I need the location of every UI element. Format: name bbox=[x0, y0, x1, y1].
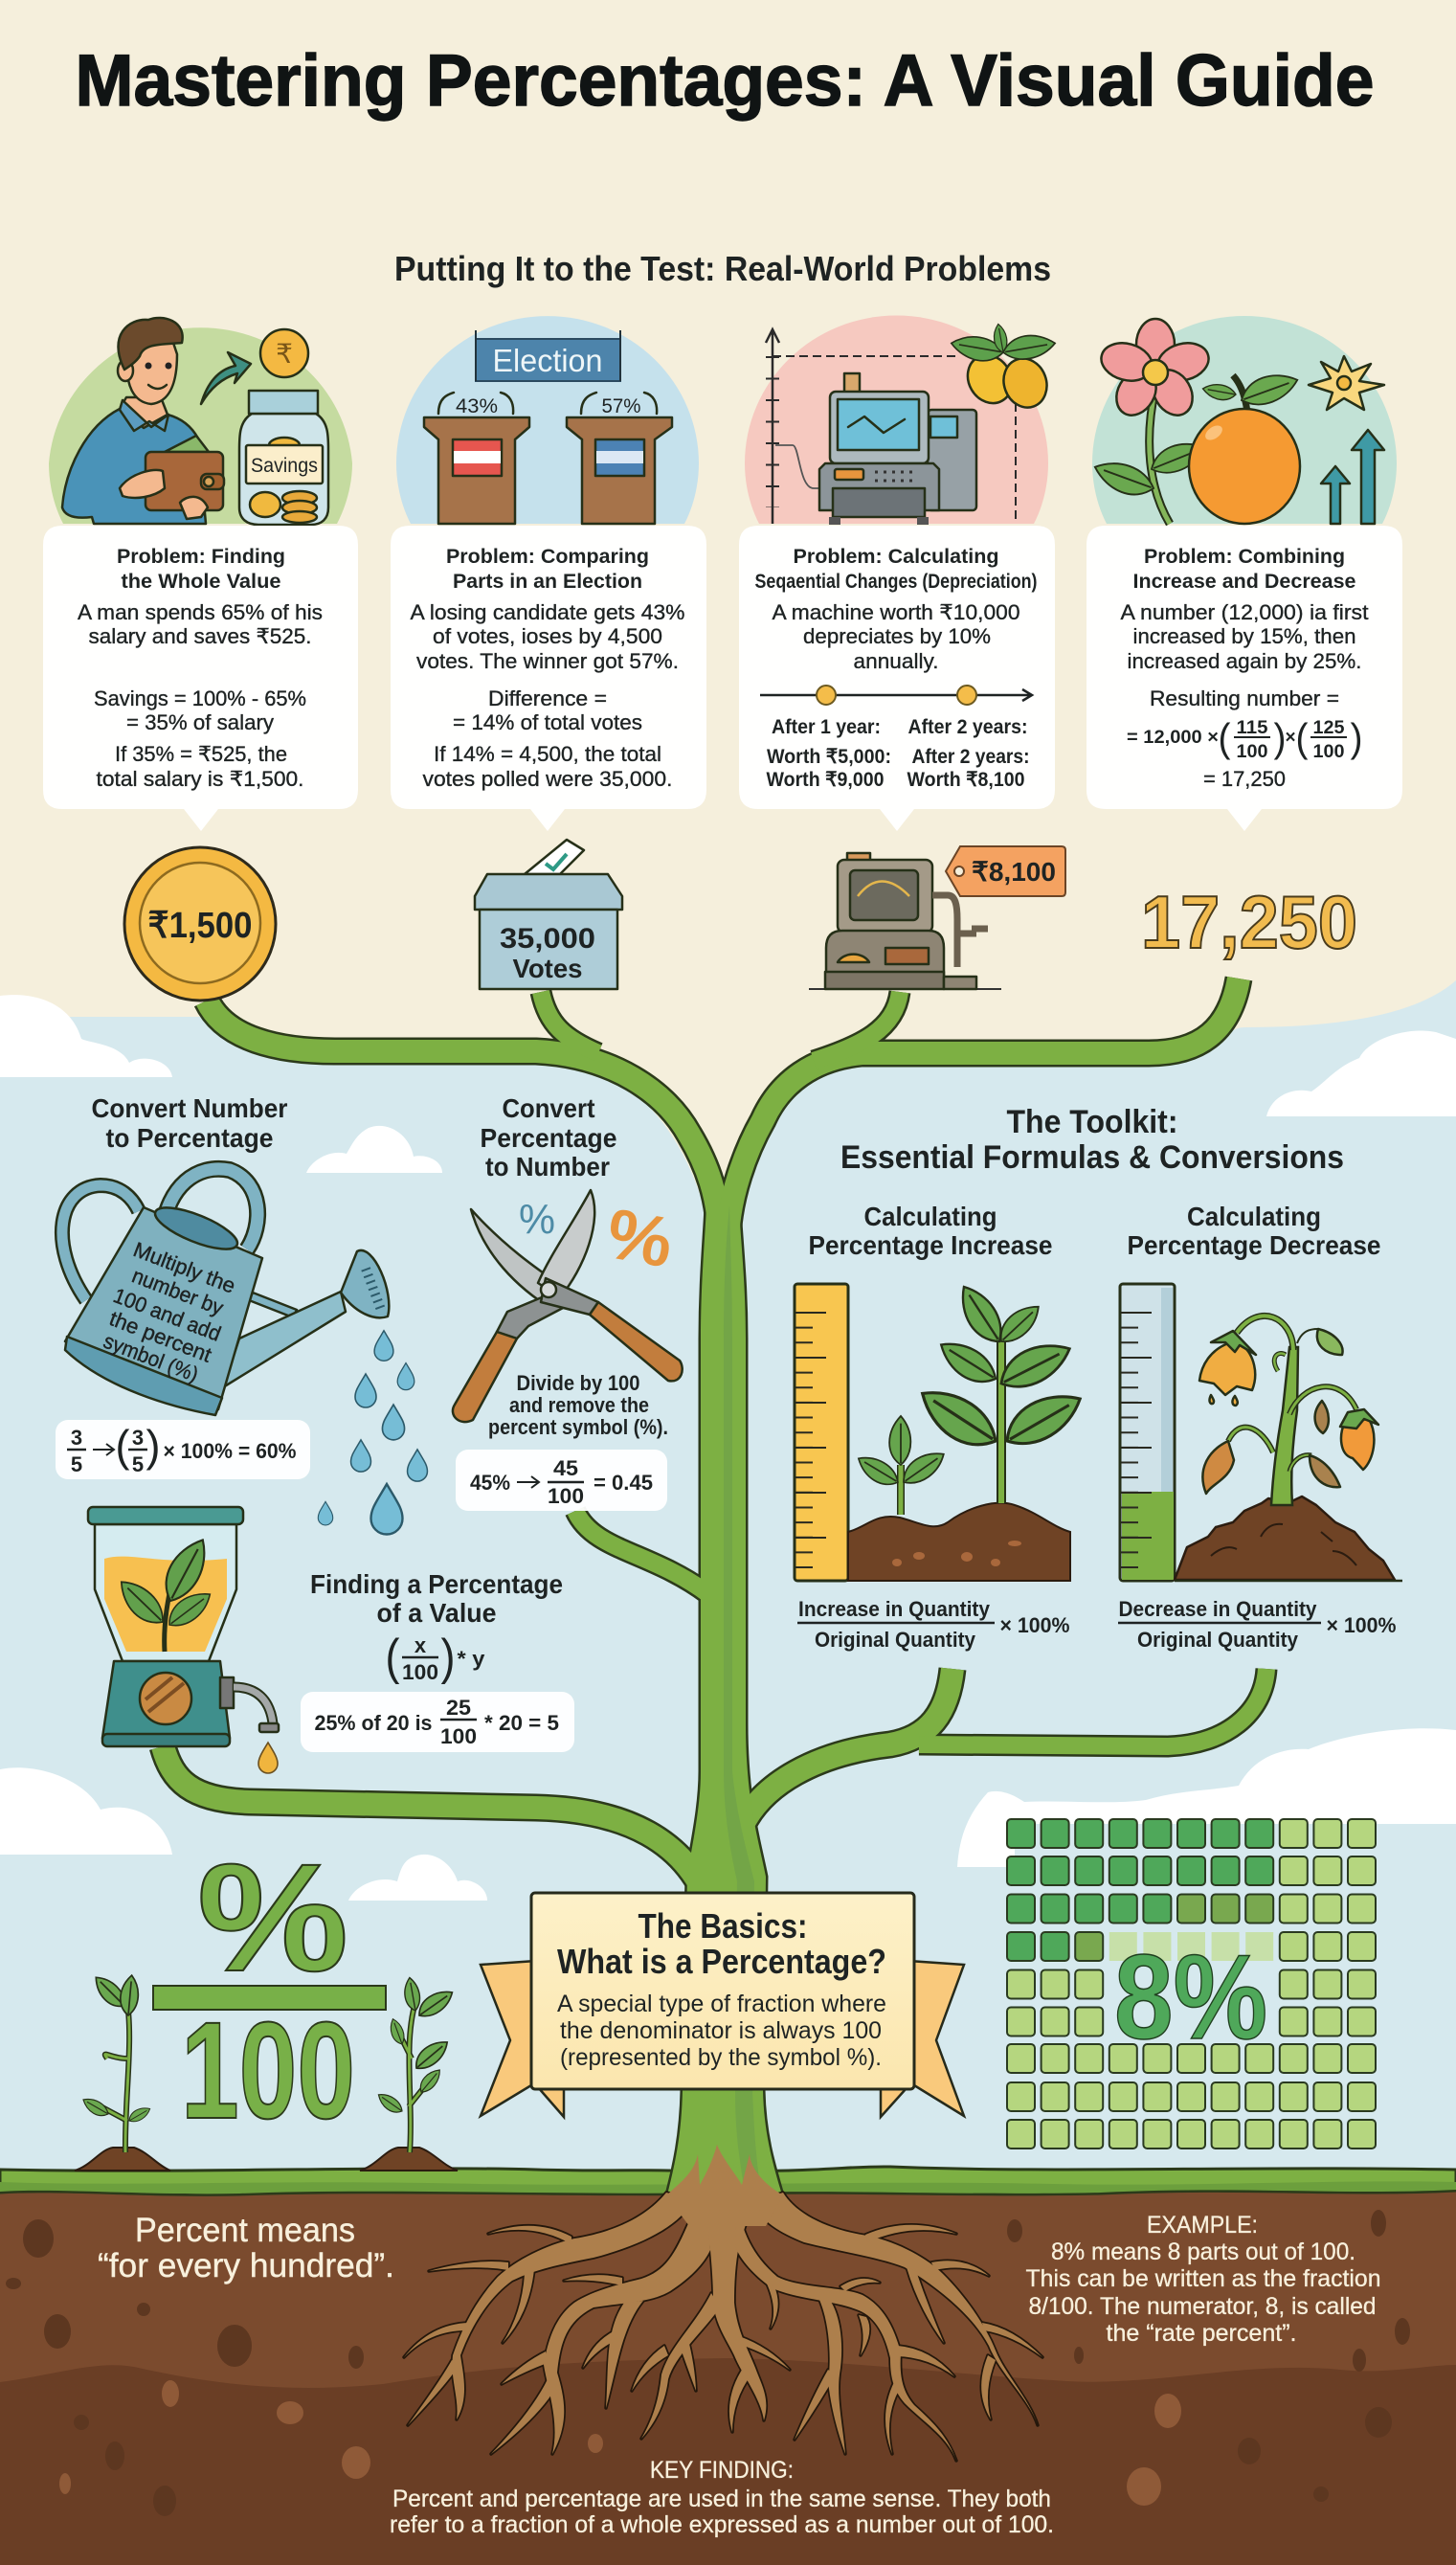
text: example: 8/100. The numerator, 8, is called bbox=[1028, 2293, 1377, 2320]
card: problem 3: Problem: Calculating bbox=[793, 546, 999, 568]
result: coin 1,500: ₹1,500 bbox=[147, 906, 253, 946]
formula box: 25% of 20: 25 bbox=[446, 1696, 471, 1720]
formula: percentage increase: × 100% bbox=[999, 1613, 1070, 1637]
card: problem 3: depreciates by 10% bbox=[803, 624, 991, 648]
formula: x over 100 times y: * y bbox=[458, 1647, 485, 1671]
sign board: (represented by the symbol %). bbox=[560, 2044, 882, 2071]
formula box: 45% to 0.45: 45% bbox=[470, 1471, 510, 1495]
card: problem 3: Seqaential Changes (Depreciation) bbox=[754, 571, 1038, 593]
card: problem 1: A man spends 65% of his bbox=[78, 600, 323, 624]
card: problem 2: votes. The winner got 57%. bbox=[416, 649, 679, 673]
icon: watering can: the percent bbox=[106, 1306, 214, 1367]
percent symbol over 100: % bbox=[197, 1832, 348, 2003]
percent symbol over 100: 100 bbox=[181, 1993, 355, 2148]
heading: to Number bbox=[485, 1152, 610, 1181]
water drops bbox=[318, 1331, 427, 1534]
icon: pruning shears: % bbox=[519, 1196, 555, 1243]
icon: watering can bbox=[62, 1169, 389, 1415]
illustration: man with wallet and savings jar: ₹ bbox=[276, 339, 293, 369]
text: divide by 100: Divide by 100 bbox=[517, 1371, 639, 1395]
text: example bbox=[1026, 2212, 1380, 2347]
card: problem 2: votes polled were 35,000. bbox=[423, 767, 672, 791]
formula box: 3/5 to 60%: 5 bbox=[71, 1452, 82, 1476]
heading: Essential Formulas & Conversions bbox=[840, 1139, 1344, 1176]
formula: compound increase: ( bbox=[1296, 715, 1308, 760]
formula box: 25% of 20: 25% of 20 is bbox=[314, 1711, 433, 1735]
formula: compound increase bbox=[1127, 715, 1363, 762]
tree roots bbox=[404, 2145, 1042, 2461]
icon: growing plants in soil bbox=[848, 1279, 1088, 1581]
formula box: 25% of 20 bbox=[301, 1692, 574, 1752]
card: problem 4: increased by 15%, then bbox=[1133, 624, 1355, 648]
text: example: the “rate percent”. bbox=[1107, 2320, 1296, 2347]
card: problem 2: If 14% = 4,500, the total bbox=[434, 742, 661, 766]
card: problem 3: After 2 years: bbox=[907, 716, 1028, 738]
sign board: the denominator is always 100 bbox=[560, 2017, 882, 2044]
icon: watering can: number by bbox=[129, 1263, 227, 1320]
icon: watering can: Multiply the bbox=[130, 1237, 238, 1298]
panel: finding a percentage of a value bbox=[88, 1507, 574, 1773]
card: problem 3: Worth ₹8,100 bbox=[907, 769, 1024, 791]
card: problem 3: After 2 years: bbox=[911, 746, 1030, 768]
illustration: man with wallet and savings jar bbox=[49, 318, 352, 525]
formula: compound increase: × bbox=[1285, 728, 1296, 748]
card: problem 3: annually. bbox=[854, 649, 938, 673]
text: divide by 100 bbox=[488, 1371, 668, 1439]
panel: percent over 100 with sprouts bbox=[75, 1832, 458, 2284]
card: problem 2: Problem: Comparing bbox=[446, 546, 649, 568]
result: old machine with 8,100 tag bbox=[809, 846, 1065, 989]
ribbon left bbox=[481, 1959, 564, 2117]
formula box: 3/5 to 60%: ( bbox=[115, 1421, 130, 1471]
formula: compound increase: 125 bbox=[1313, 718, 1345, 738]
card: problem 2 bbox=[391, 526, 706, 831]
panel: the toolkit bbox=[795, 1104, 1402, 1652]
heading bbox=[310, 1569, 563, 1628]
icon: left sprout bbox=[75, 1971, 170, 2171]
formula box: 3/5 to 60%: × 100% = 60% bbox=[163, 1439, 297, 1463]
heading: Percentage bbox=[481, 1123, 616, 1153]
formula: compound increase: 115 bbox=[1237, 718, 1268, 738]
sub-panel: percentage decrease bbox=[1118, 1202, 1402, 1652]
text: divide by 100: percent symbol (%). bbox=[488, 1415, 668, 1439]
card: problem 4: = 17,250 bbox=[1203, 767, 1286, 791]
heading: Convert bbox=[502, 1093, 595, 1123]
grass strip bbox=[0, 2167, 1456, 2194]
icon: right sprout bbox=[360, 1976, 458, 2171]
formula: percentage decrease bbox=[1118, 1597, 1396, 1652]
sub-panel: percentage decrease: Percentage Decrease bbox=[1128, 1230, 1380, 1260]
sub-panel: percentage decrease: Calculating bbox=[1187, 1202, 1321, 1231]
title: Mastering Percentages: A Visual Guide bbox=[75, 40, 1375, 122]
sub-panel: percentage increase bbox=[795, 1202, 1088, 1652]
result: ballot box 35,000 votes: Votes bbox=[513, 954, 582, 983]
card: problem 3: Worth ₹9,000 bbox=[766, 769, 885, 791]
illustration: election podiums bbox=[396, 316, 699, 524]
panel: 8 percent grid bbox=[1007, 1819, 1380, 2347]
result: ballot box 35,000 votes: 35,000 bbox=[500, 923, 595, 955]
text: key finding: refer to a fraction of a whole expressed as a number out of 100. bbox=[390, 2511, 1054, 2538]
soil bbox=[0, 2188, 1456, 2565]
card: problem 1: = 35% of salary bbox=[126, 710, 274, 734]
sky background bbox=[0, 980, 1456, 2202]
text: key finding bbox=[390, 2457, 1054, 2538]
formula: compound increase: ) bbox=[1273, 715, 1287, 760]
text: percent means: Percent means bbox=[135, 2212, 355, 2249]
formula box: 3/5 to 60%: 3 bbox=[71, 1426, 82, 1450]
illustration: election podiums: 43% bbox=[456, 395, 498, 417]
illustration: machine with axes and lemons bbox=[745, 316, 1057, 525]
formula box: 25% of 20: 100 bbox=[440, 1724, 477, 1748]
sign board: A special type of fraction where bbox=[557, 1991, 886, 2017]
icon: watering can: 100 and add bbox=[110, 1283, 224, 1346]
hundred-cell grid bbox=[1007, 1819, 1376, 2149]
formula: percentage decrease: × 100% bbox=[1327, 1613, 1396, 1637]
card: problem 1: the Whole Value bbox=[121, 571, 281, 593]
timeline bbox=[760, 686, 1032, 705]
panel: problem 2 election bbox=[391, 316, 706, 989]
result: old machine with 8,100 tag: ₹8,100 bbox=[972, 857, 1056, 887]
panel: the basics sign bbox=[481, 1893, 964, 2117]
illustration: flower, orange and arrows bbox=[1090, 316, 1397, 524]
card: problem 2: of votes, ioses by 4,500 bbox=[433, 624, 662, 648]
formula: compound increase: ( bbox=[1218, 715, 1231, 760]
card: problem 4: Resulting number = bbox=[1150, 686, 1339, 710]
sub-panel: percentage increase: Calculating bbox=[863, 1202, 997, 1231]
formula: x over 100 times y: x bbox=[414, 1633, 427, 1657]
formula: compound increase: ) bbox=[1350, 715, 1363, 760]
icon: watering can: symbol (%) bbox=[101, 1329, 202, 1386]
card: problem 4: increased again by 25%. bbox=[1128, 649, 1361, 673]
formula: percentage decrease: Original Quantity bbox=[1137, 1628, 1299, 1652]
text: example: EXAMPLE: bbox=[1147, 2212, 1258, 2239]
heading bbox=[481, 1093, 616, 1181]
clouds bbox=[0, 995, 1456, 1901]
card: problem 2: A losing candidate gets 43% bbox=[410, 600, 685, 624]
card: problem 1: Problem: Finding bbox=[117, 546, 285, 568]
card: problem 3 bbox=[739, 526, 1055, 831]
illustration: election podiums: 57% bbox=[601, 395, 641, 417]
icon: blender with plant bbox=[88, 1507, 279, 1773]
card: problem 4: A number (12,000) ia first bbox=[1120, 600, 1369, 624]
card: problem 4: Problem: Combining bbox=[1144, 546, 1345, 568]
result: 17,250: 17,250 bbox=[1141, 880, 1357, 964]
illustration: election podiums: Election bbox=[492, 343, 603, 378]
text: key finding: KEY FINDING: bbox=[650, 2457, 794, 2484]
formula box: 45% to 0.45: = 0.45 bbox=[594, 1471, 653, 1495]
formula box: 45% to 0.45 bbox=[456, 1450, 667, 1511]
card: problem 3: After 1 year: bbox=[772, 716, 881, 738]
formula: compound increase: = 12,000 × bbox=[1127, 728, 1219, 748]
formula: x over 100 times y bbox=[385, 1630, 485, 1685]
panel: problem 3 depreciation bbox=[739, 316, 1065, 989]
formula: compound increase: 100 bbox=[1237, 742, 1267, 762]
card: problem 1: Savings = 100% - 65% bbox=[94, 686, 306, 710]
formula box: 25% of 20: * 20 = 5 bbox=[484, 1711, 559, 1735]
illustration: man with wallet and savings jar: Savings bbox=[251, 455, 318, 477]
formula box: 3/5 to 60% bbox=[56, 1420, 310, 1479]
text: key finding: Percent and percentage are used in the same sense. They both bbox=[392, 2486, 1051, 2512]
card: problem 1: salary and saves ₹525. bbox=[88, 624, 312, 648]
formula box: 3/5 to 60%: 5 bbox=[132, 1452, 144, 1476]
card: problem 1: total salary is ₹1,500. bbox=[96, 767, 304, 791]
panel: problem 1 savings bbox=[43, 318, 358, 1001]
percent symbol over 100 bbox=[153, 1832, 386, 2148]
panel: problem 4 combining bbox=[1086, 316, 1402, 964]
card: problem 2: Parts in an Election bbox=[453, 571, 642, 593]
tree branches and trunk bbox=[163, 979, 1266, 2198]
card: problem 4: Increase and Decrease bbox=[1133, 571, 1355, 593]
formula: percentage decrease: Decrease in Quantity bbox=[1118, 1597, 1317, 1621]
text: divide by 100: and remove the bbox=[509, 1393, 649, 1417]
result: coin 1,500 bbox=[124, 847, 276, 1001]
panel: convert percentage to number bbox=[453, 1093, 683, 1511]
icon: wilting plant in soil bbox=[1175, 1316, 1402, 1581]
formula box: 3/5 to 60%: ) bbox=[146, 1421, 161, 1471]
formula: percentage increase: Increase in Quantity bbox=[798, 1597, 991, 1621]
formula: x over 100 times y: 100 bbox=[402, 1660, 438, 1684]
heading bbox=[92, 1093, 288, 1153]
8 percent label: 8% bbox=[1114, 1931, 1267, 2064]
card: problem 2: = 14% of total votes bbox=[453, 710, 642, 734]
card: problem 1 bbox=[43, 526, 358, 831]
heading: Finding a Percentage bbox=[310, 1569, 563, 1599]
card: problem 1: If 35% = ₹525, the bbox=[115, 742, 287, 766]
heading: Convert Number bbox=[92, 1093, 288, 1123]
sub-panel: percentage increase: Percentage Increase bbox=[808, 1230, 1053, 1260]
ribbon right bbox=[881, 1959, 964, 2117]
heading: real-world problems: Putting It to the Test: Real-World Problems bbox=[394, 249, 1051, 288]
icon: yellow ruler bbox=[795, 1284, 848, 1581]
sign board bbox=[531, 1893, 914, 2089]
panel: convert number to percentage bbox=[56, 1093, 427, 1534]
formula: x over 100 times y: ) bbox=[440, 1630, 456, 1685]
formula box: 3/5 to 60%: 3 bbox=[132, 1426, 144, 1450]
sign board: What is a Percentage? bbox=[557, 1942, 886, 1981]
text: example: This can be written as the fraction bbox=[1026, 2265, 1380, 2292]
formula box: 45% to 0.45: 45 bbox=[553, 1456, 578, 1480]
formula: compound increase: 100 bbox=[1313, 742, 1344, 762]
icon: pruning shears bbox=[453, 1190, 683, 1422]
heading: of a Value bbox=[377, 1598, 496, 1628]
formula box: 45% to 0.45: 100 bbox=[548, 1484, 584, 1508]
heading bbox=[840, 1104, 1344, 1176]
icon: measuring tube bbox=[1120, 1284, 1175, 1581]
text: percent means bbox=[98, 2212, 394, 2284]
result: ballot box 35,000 votes bbox=[475, 840, 622, 989]
formula: x over 100 times y: ( bbox=[385, 1630, 400, 1685]
text: example: 8% means 8 parts out of 100. bbox=[1051, 2239, 1355, 2265]
text: percent means: “for every hundred”. bbox=[98, 2247, 394, 2284]
card: problem 3: A machine worth ₹10,000 bbox=[772, 600, 1020, 624]
card: problem 3: Worth ₹5,000: bbox=[767, 746, 891, 768]
card: problem 2: Difference = bbox=[488, 686, 607, 710]
formula: percentage increase: Original Quantity bbox=[815, 1628, 976, 1652]
icon: pruning shears: % bbox=[601, 1193, 679, 1283]
card: problem 4 bbox=[1086, 526, 1402, 831]
formula: percentage increase bbox=[797, 1597, 1070, 1652]
heading: to Percentage bbox=[105, 1123, 274, 1153]
heading: The Toolkit: bbox=[1007, 1104, 1177, 1140]
sign board: The Basics: bbox=[638, 1906, 808, 1946]
